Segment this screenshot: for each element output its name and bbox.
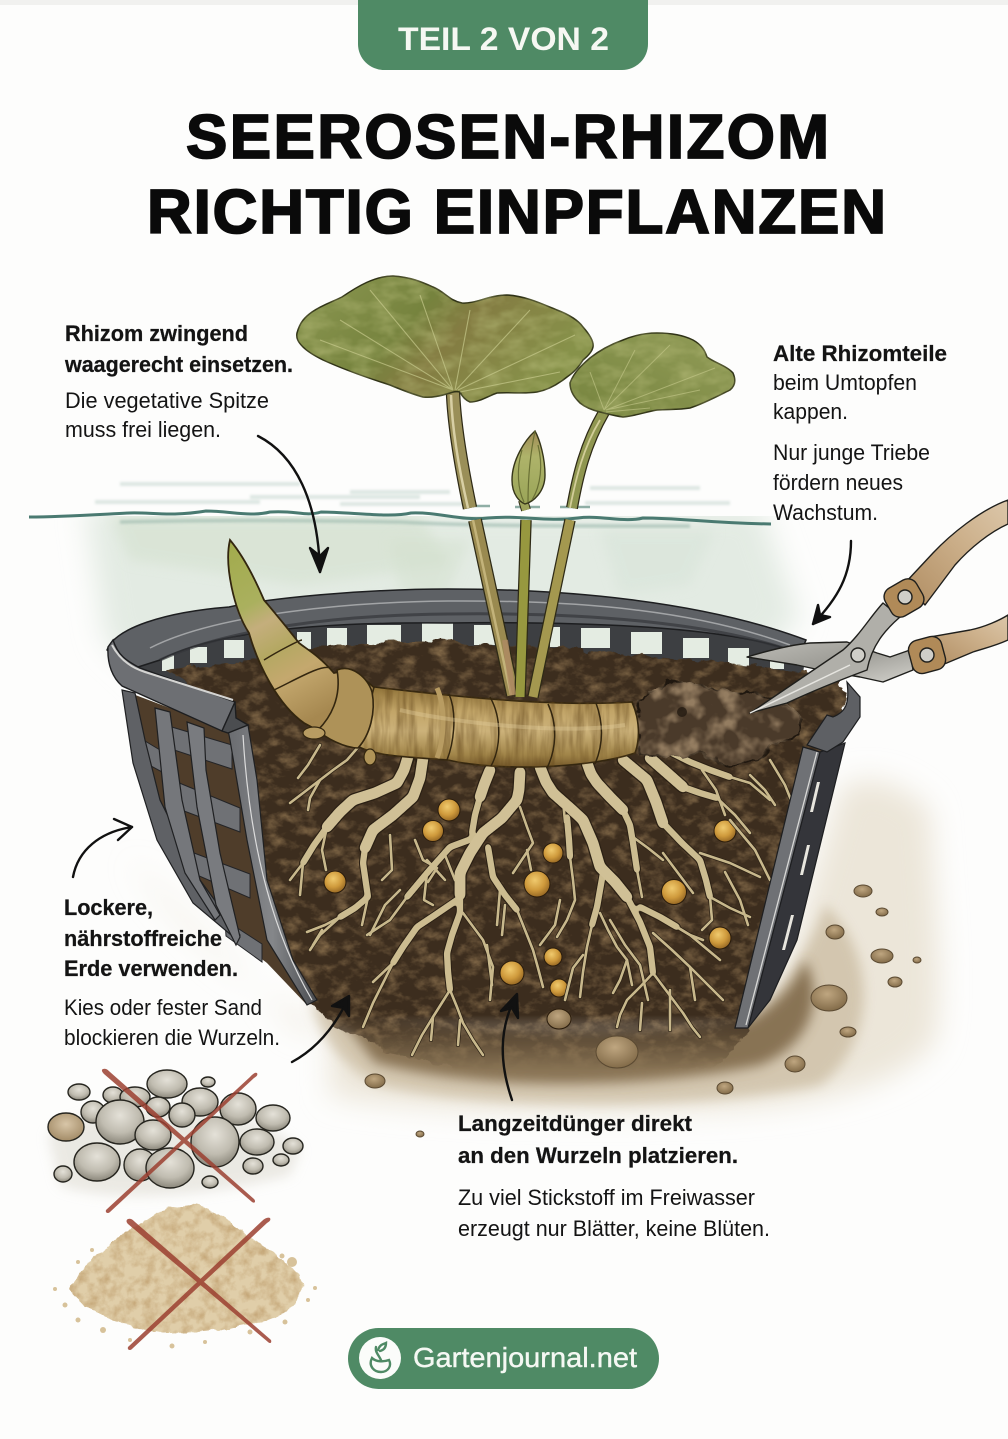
lower blade and arm — [750, 603, 900, 713]
header badge: part 2 of 2: TEIL 2 VON 2 — [398, 21, 609, 57]
large lily pad — [297, 276, 593, 402]
callout: keep rhizome horizontal: waagerecht einsetzen. — [64, 352, 293, 377]
left rim — [108, 640, 248, 733]
callout: keep rhizome horizontal: Rhizom zwingend — [65, 321, 248, 346]
callout: cut old rhizome parts: kappen. — [773, 399, 848, 424]
callout: loose soil: Kies oder fester Sand — [64, 995, 262, 1020]
callout: cut old rhizome parts — [773, 341, 947, 525]
callout: cut old rhizome parts: Alte Rhizomteile — [773, 341, 947, 366]
title: SEEROSEN-RHIZOM — [186, 103, 829, 172]
ferrules — [880, 575, 928, 621]
fertilizer granules — [324, 799, 736, 1029]
callout: loose soil: blockieren die Wurzeln. — [64, 1025, 280, 1050]
callout: cut old rhizome parts: fördern neues — [773, 470, 903, 495]
stems below water — [473, 520, 570, 697]
old dark rhizome section — [636, 680, 802, 766]
pruning shears — [747, 500, 1008, 713]
header badge: part 2 of 2 — [358, 0, 648, 70]
wooden handles — [905, 500, 1008, 605]
callout: cut old rhizome parts: Nur junge Triebe — [773, 440, 930, 465]
callout: cut old rhizome parts: beim Umtopfen — [773, 370, 917, 395]
callout: fertilizer at roots: an den Wurzeln platzieren. — [458, 1143, 738, 1168]
callout: loose soil — [64, 895, 280, 1050]
callout: keep rhizome horizontal — [64, 321, 293, 442]
arrow: to soil — [292, 996, 349, 1062]
callout: fertilizer at roots: Zu viel Stickstoff im Freiwasser — [458, 1185, 755, 1210]
emergent stems above water — [451, 392, 604, 510]
callout: loose soil: Erde verwenden. — [64, 956, 238, 981]
roots — [290, 745, 795, 1055]
callout: fertilizer at roots: Langzeitdünger direkt — [458, 1111, 693, 1136]
rejected gravel pile — [48, 1070, 303, 1196]
rhizome — [228, 540, 638, 768]
arrow: to rhizome tip zone — [258, 436, 328, 572]
rivets — [898, 590, 912, 604]
illustration: planted water lily rhizome in basket — [29, 276, 1008, 1137]
arrow: to fertilizer — [501, 994, 518, 1100]
ground wash under the basket — [130, 780, 939, 1112]
callout: cut old rhizome parts: Wachstum. — [773, 500, 878, 525]
small lily pad — [570, 333, 735, 417]
callout: loose soil: Lockere, — [64, 895, 153, 920]
flower bud — [512, 431, 545, 504]
pebbles on the ground — [365, 885, 921, 1137]
callout: fertilizer at roots: erzeugt nur Blätter, keine Blüten. — [458, 1216, 770, 1241]
basket: back rim and wall — [107, 589, 806, 690]
rejected sand pile — [53, 1204, 317, 1348]
title — [147, 103, 886, 247]
title: RICHTIG EINPFLANZEN — [147, 178, 886, 247]
soil cross-section — [165, 640, 848, 1078]
back wall windows — [162, 623, 784, 671]
upper blade and arm — [747, 642, 913, 682]
basket: right wall — [735, 682, 860, 1028]
basket: left wall with slats — [108, 640, 317, 1005]
callout: loose soil: nährstoffreiche — [64, 926, 222, 951]
footer badge — [348, 1328, 659, 1389]
water wash — [29, 481, 800, 648]
arrow: to basket wall — [73, 819, 132, 877]
callout: keep rhizome horizontal: Die vegetative Spitze — [65, 388, 269, 413]
callout: fertilizer at roots — [458, 1111, 770, 1241]
red cross marks over gravel and sand — [102, 1069, 271, 1350]
footer badge: Gartenjournal.net — [413, 1342, 637, 1373]
arrow: to shears — [813, 541, 851, 624]
callout: keep rhizome horizontal: muss frei liegen. — [65, 417, 221, 442]
icon: plant in bowl — [359, 1337, 401, 1379]
